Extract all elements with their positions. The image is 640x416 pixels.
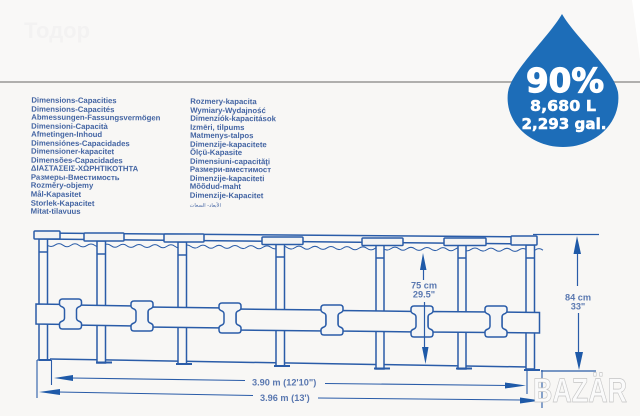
- text block: left column of translations: Storlek-Kapacitet: [31, 198, 94, 208]
- text block: left column of translations: Rozměry-objemy: [31, 181, 93, 190]
- text block: left column of translations: Dimensioner-kapacitet: [31, 147, 114, 156]
- dimension: 75 cm water depth: [411, 253, 437, 364]
- drop gallons: 2,293 gal.: [522, 115, 606, 133]
- text block: right column of translations: Dimenzije-Kapacitet: [190, 191, 263, 200]
- pool caps: [34, 231, 537, 246]
- dimension: 84 cm wall height: [533, 234, 599, 371]
- drop percent: 90%: [526, 61, 604, 100]
- text block: left column of translations: Mitat-tilavuus: [31, 207, 81, 216]
- text block: left column of translations: Dimensiónes-Capacidades: [31, 138, 130, 148]
- text block: right column of translations: [190, 97, 276, 208]
- water wave: [47, 244, 543, 252]
- pool diagram: [34, 231, 543, 370]
- text block: right column of translations: Dimenzije-kapacitete: [190, 139, 267, 149]
- text block: right column of translations: Dimenzije-kapaciteti: [190, 174, 264, 183]
- text block: left column of translations: [31, 96, 160, 216]
- text block: left column of translations: Dimensions-Capacités: [31, 104, 114, 114]
- text block: left column of translations: Dimensões-Capacidades: [31, 155, 123, 165]
- top rail: [40, 233, 533, 244]
- label 3.90 m: 3.90 m (12'10"): [252, 378, 316, 388]
- text block: right column of translations: Dimenziók-kapacitások: [190, 114, 276, 123]
- pole feet: [39, 360, 540, 370]
- dimension: 3.90 m width: [52, 360, 527, 394]
- faint watermark: Todor: Тодор: [24, 18, 90, 43]
- label 3.96 m: 3.96 m (13'): [260, 393, 310, 403]
- icon: water drop with capacity: [508, 14, 618, 147]
- text block: right column of translations: Mõõdud-maht: [190, 182, 241, 192]
- text block: right column of translations: الأبعاد- السعات: [190, 202, 221, 208]
- text block: right column of translations: Matmenys-talpos: [190, 131, 253, 140]
- text block: right column of translations: Размери-вместимост: [190, 165, 271, 175]
- text block: left column of translations: Размеры-Вместимость: [31, 173, 120, 182]
- text block: left column of translations: Afmetingen-Inhoud: [31, 130, 102, 139]
- label 84 cm: 84 cm: [565, 292, 591, 302]
- text block: left column of translations: Mål-Kapasitet: [31, 190, 81, 199]
- text block: left column of translations: Abmessungen-Fassungsvermögen: [31, 113, 160, 122]
- text block: left column of translations: ΔΙΑΣΤΑΣΕΙΣ-ΧΩΡΗΤΙΚΟΤΗΤΑ: [31, 164, 138, 174]
- belt clips: [60, 299, 507, 337]
- belt segments: [36, 304, 540, 333]
- dimension: 3.96 m width: [37, 360, 542, 408]
- text block: right column of translations: Rozmery-kapacita: [190, 97, 257, 106]
- label 75 cm: 75 cm: [411, 280, 437, 290]
- bottom ground line: [50, 359, 527, 367]
- text block: left column of translations: Dimensions-Capacities: [31, 96, 117, 105]
- drop litres: 8,680 L: [530, 97, 596, 115]
- poles: [39, 239, 534, 369]
- text block: right column of translations: Wymiary-Wydajność: [190, 105, 266, 115]
- text block: right column of translations: Dimensiuni-capacităţi: [190, 157, 270, 166]
- text block: right column of translations: Izmēri, tilpums: [190, 122, 244, 132]
- label 29.5: 29.5": [413, 290, 435, 300]
- text block: right column of translations: Ölçü-Kapasite: [190, 148, 242, 157]
- label 33: 33": [571, 302, 585, 312]
- text block: left column of translations: Dimensioni-Capacità: [31, 121, 108, 131]
